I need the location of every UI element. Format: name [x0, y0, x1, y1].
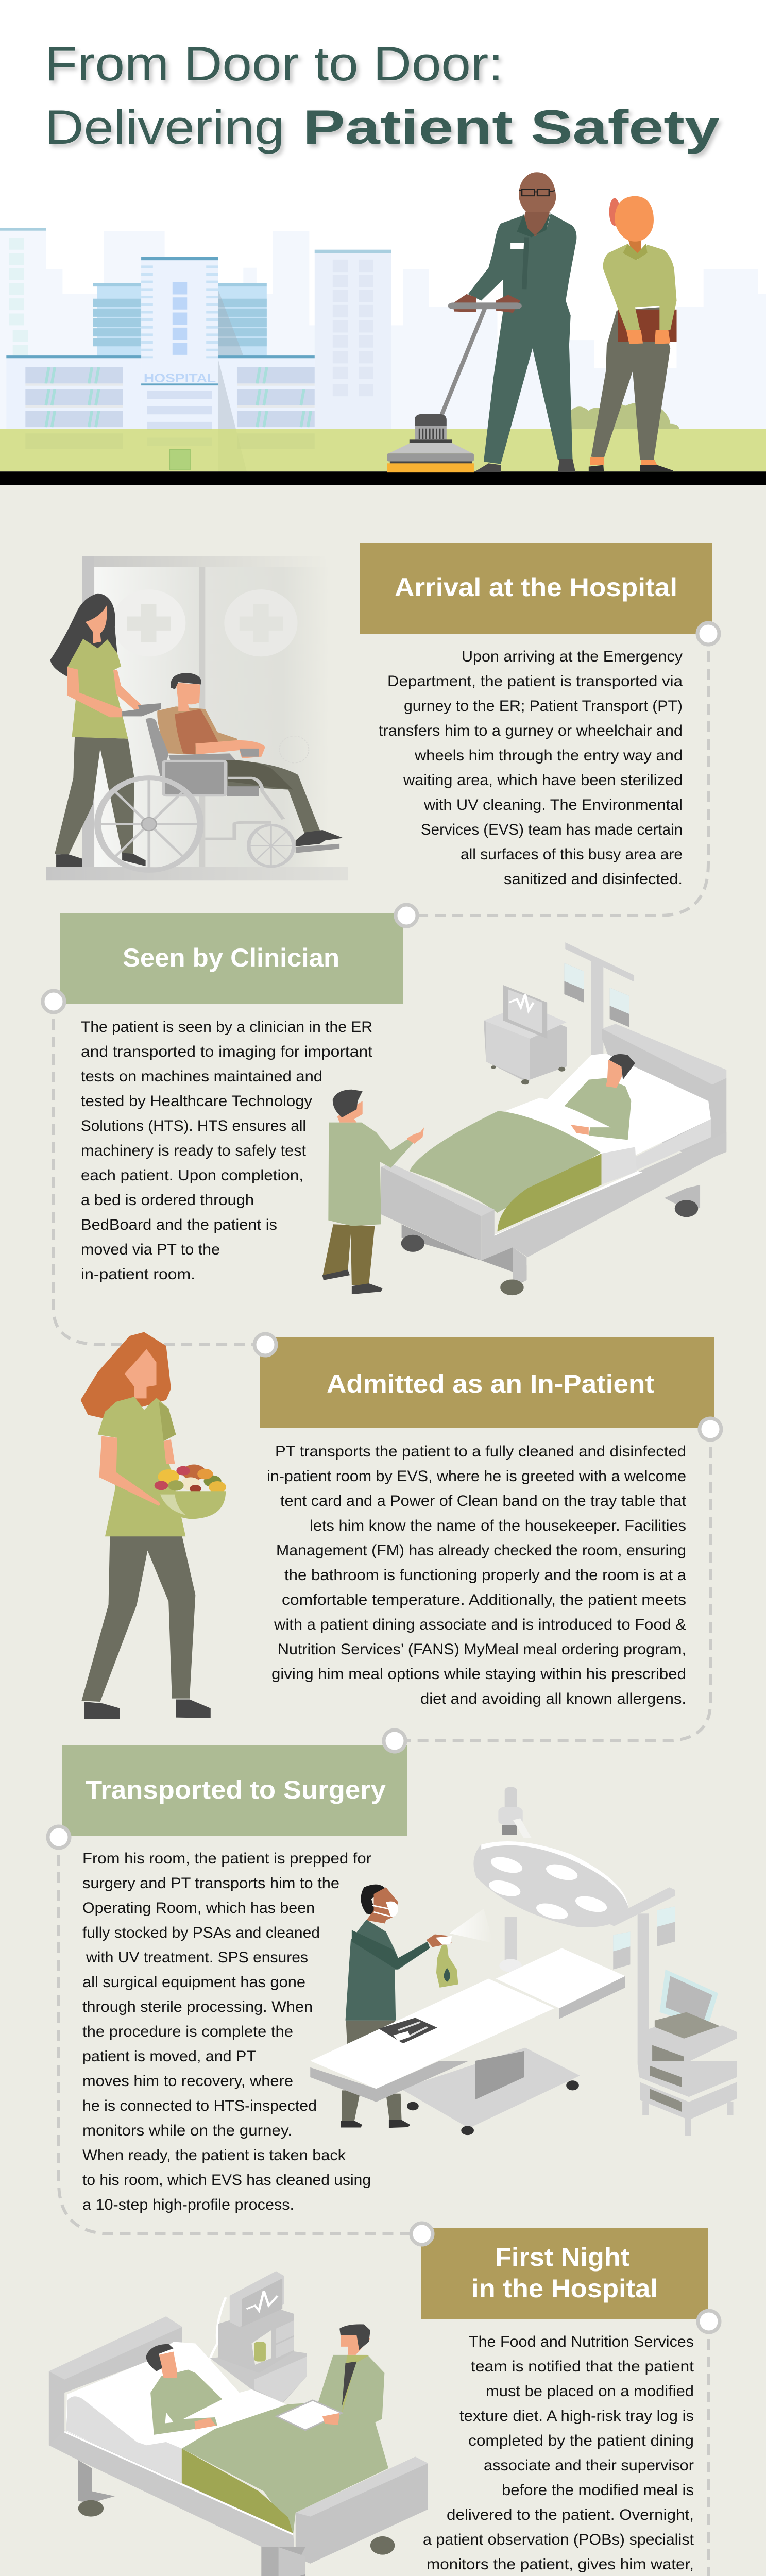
- node: [411, 2223, 433, 2245]
- node: [254, 1334, 276, 1355]
- heading: in the Hospital: [471, 2274, 658, 2303]
- body text: and transported to imaging for important: [81, 1043, 373, 1060]
- body text: a bed is ordered through: [81, 1192, 254, 1209]
- body text: Nutrition Services’ (FANS) MyMeal meal ordering program,: [278, 1641, 686, 1658]
- body text: [81, 1019, 373, 1283]
- body text: gurney to the ER; Patient Transport (PT): [404, 698, 683, 715]
- heading: First Night: [495, 2243, 629, 2272]
- body text: all surgical equipment has gone: [82, 1974, 305, 1991]
- illustration: night check at patient bed: [49, 2271, 428, 2576]
- body text: must be placed on a modified: [486, 2383, 694, 2400]
- body text: Department, the patient is transported via: [387, 673, 683, 690]
- body text: the procedure is complete the: [82, 2023, 293, 2040]
- panel: admitted as an in-patient: [80, 1332, 721, 1719]
- body text: sanitized and disinfected.: [504, 871, 683, 888]
- node: [43, 991, 64, 1012]
- body text: From his room, the patient is prepped for: [82, 1850, 371, 1867]
- panel: seen by clinician: [43, 905, 726, 1295]
- illustration: clinician at patient bed: [322, 942, 726, 1295]
- body text: machinery is ready to safely test: [81, 1142, 307, 1159]
- body text: waiting area, which have been sterilized: [403, 772, 683, 789]
- body text: tested by Healthcare Technology: [81, 1093, 312, 1110]
- node: [48, 1826, 70, 1848]
- body text: monitors the patient, gives him water,: [427, 2556, 694, 2573]
- body text: When ready, the patient is taken back: [82, 2147, 346, 2164]
- body text: associate and their supervisor: [484, 2457, 694, 2474]
- title: [45, 37, 720, 154]
- body text: a 10-step high-profile process.: [82, 2196, 294, 2213]
- body text: the bathroom is functioning properly and the room is at a: [284, 1567, 686, 1584]
- heading: [62, 1745, 407, 1836]
- body text: tests on machines maintained and: [81, 1068, 322, 1085]
- body text: Operating Room, which has been: [82, 1900, 315, 1917]
- body text: diet and avoiding all known allergens.: [420, 1690, 686, 1707]
- heading: [421, 2228, 708, 2319]
- body text: [267, 1443, 687, 1707]
- illustration: janitor with floor machine: [387, 172, 576, 472]
- illustration: dining associate with fruit bowl: [80, 1332, 226, 1719]
- body text: each patient. Upon completion,: [81, 1167, 303, 1184]
- header banner: [0, 0, 766, 485]
- body text: surgery and PT transports him to the: [82, 1875, 339, 1892]
- body text: Services (EVS) team has made certain: [421, 821, 683, 838]
- node: [700, 1418, 721, 1440]
- title: From Door to Door:: [45, 37, 503, 91]
- node: [698, 2311, 720, 2332]
- body text: all surfaces of this busy area are: [461, 846, 683, 863]
- heading: Transported to Surgery: [86, 1775, 386, 1804]
- body text: team is notified that the patient: [471, 2358, 694, 2375]
- body text: with UV cleaning. The Environmental: [423, 796, 683, 814]
- body text: tent card and a Power of Clean band on the tray table that: [280, 1493, 687, 1510]
- body text: transfers him to a gurney or wheelchair and: [379, 722, 683, 739]
- body text: comfortable temperature. Additionally, the patient meets: [282, 1591, 686, 1608]
- node: [384, 1730, 405, 1752]
- title: Delivering: [45, 100, 284, 154]
- body text: he is connected to HTS-inspected: [82, 2097, 317, 2114]
- dashed connector path: [54, 634, 710, 2576]
- panel: arrival at the hospital: [46, 543, 719, 888]
- heading: [360, 543, 712, 634]
- body text: Management (FM) has already checked the room, ensuring: [276, 1542, 686, 1559]
- heading: Seen by Clinician: [123, 943, 339, 972]
- illustration: nurse with clipboard: [589, 196, 677, 471]
- body text: with a patient dining associate and is introduced to Food &: [274, 1616, 686, 1633]
- body text: before the modified meal is: [502, 2482, 694, 2499]
- heading: [60, 913, 403, 1004]
- body text: in-patient room by EVS, where he is greeted with a welcome: [267, 1468, 686, 1485]
- body text: completed by the patient dining: [468, 2432, 694, 2449]
- body text: [418, 2333, 694, 2576]
- heading: [260, 1337, 714, 1428]
- body text: BedBoard and the patient is: [81, 1216, 277, 1233]
- body text: Solutions (HTS). HTS ensures all: [81, 1117, 306, 1134]
- body text: with UV treatment. SPS ensures: [86, 1949, 308, 1966]
- body text: delivered to the patient. Overnight,: [447, 2506, 694, 2523]
- node: [697, 623, 719, 645]
- body text: monitors while on the gurney.: [82, 2122, 292, 2139]
- body text: in-patient room.: [81, 1266, 195, 1283]
- node: [396, 905, 417, 926]
- heading: Arrival at the Hospital: [395, 573, 677, 602]
- body text: lets him know the name of the housekeeper. Facilities: [310, 1517, 686, 1534]
- body text: texture diet. A high-risk tray log is: [459, 2408, 694, 2425]
- body text: The patient is seen by a clinician in the ER: [81, 1019, 372, 1036]
- body text: a patient observation (POBs) specialist: [423, 2531, 694, 2548]
- heading: Admitted as an In-Patient: [327, 1369, 654, 1398]
- body text: moves him to recovery, where: [82, 2073, 293, 2090]
- body text: PT transports the patient to a fully cleaned and disinfected: [275, 1443, 686, 1460]
- body text: moved via PT to the: [81, 1241, 220, 1258]
- body text: wheels him through the entry way and: [414, 747, 683, 764]
- hospital sign: HOSPITAL: [144, 371, 216, 385]
- illustration: nurse pushing wheelchair: [46, 556, 348, 880]
- body text: Upon arriving at the Emergency: [462, 648, 683, 665]
- title: Patient Safety: [303, 100, 720, 154]
- panel: transported to surgery: [48, 1730, 737, 2213]
- body text: fully stocked by PSAs and cleaned: [82, 1924, 320, 1941]
- body text: giving him meal options while staying within his prescribed: [271, 1666, 686, 1683]
- body text: The Food and Nutrition Services: [469, 2333, 694, 2350]
- body text: [379, 648, 683, 888]
- panel: first night in the hospital: [49, 2223, 720, 2576]
- body text: to his room, which EVS has cleaned using: [82, 2172, 371, 2189]
- body text: [82, 1850, 371, 2213]
- illustration: operating room being sanitized: [310, 1787, 737, 2089]
- city and hospital scene: [0, 228, 766, 485]
- body text: through sterile processing. When: [82, 1998, 313, 2015]
- body text: patient is moved, and PT: [82, 2048, 256, 2065]
